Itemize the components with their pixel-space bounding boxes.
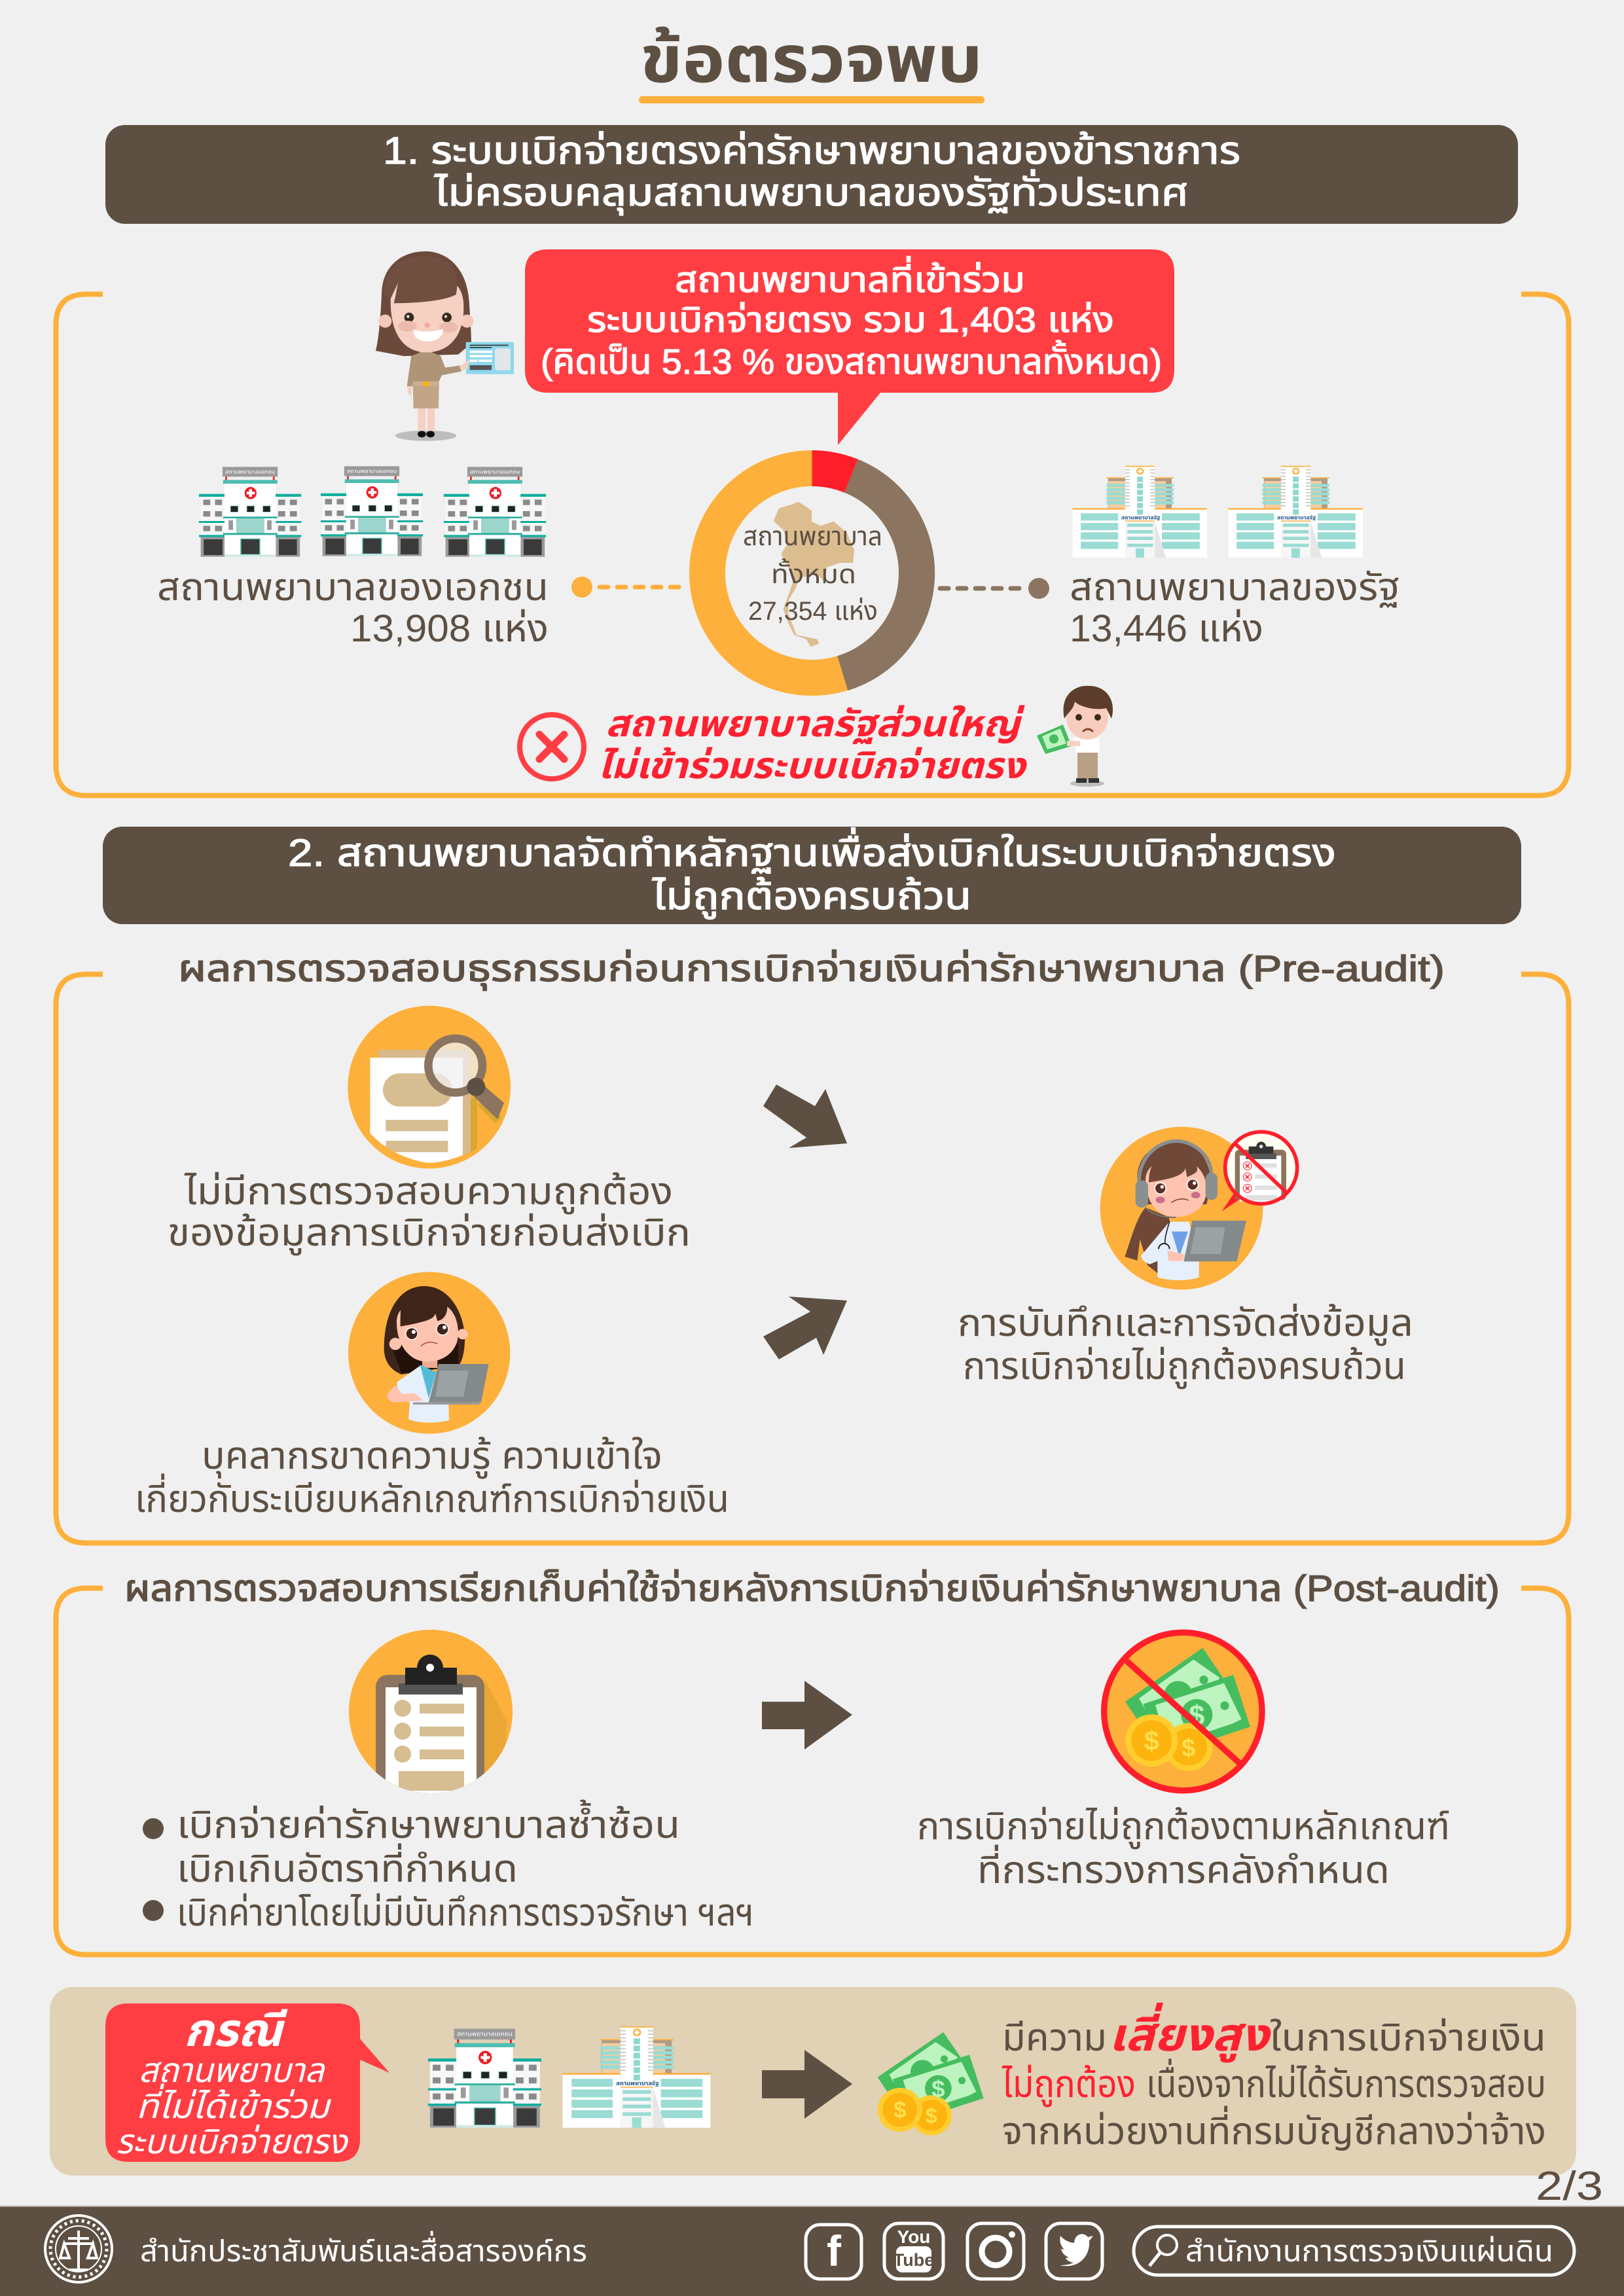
arrow: to risk <box>762 2050 852 2119</box>
icon: clipboard <box>349 1630 513 1806</box>
callout: non-participating hospitals: สถานพยาบาล <box>139 2052 325 2090</box>
text: private hospital count: สถานพยาบาลของเอกชน <box>157 566 549 609</box>
heading: section 1 <box>105 125 1518 224</box>
icon: man holding money <box>1037 686 1113 787</box>
list: post-audit findings: เบิกค่ายาโดยไม่มีบันทึกการตรวจรักษา ฯลฯ <box>177 1892 754 1934</box>
icon: document magnifier <box>348 1005 511 1169</box>
icon: money: $ <box>926 2104 937 2128</box>
text: incomplete records <box>958 1302 1413 1389</box>
callout: participating hospitals: (คิดเป็น 5.13 % ของสถานพยาบาลทั้งหมด) <box>541 340 1162 382</box>
donut chart: ทั้งหมด <box>771 558 856 589</box>
icon: instagram <box>967 2223 1024 2279</box>
callout: participating hospitals: สถานพยาบาลที่เข้าร่วม <box>675 256 1025 300</box>
icon: no money: $ <box>1189 1700 1204 1732</box>
icon: agency emblem <box>45 2215 112 2282</box>
text: office name: สำนักประชาสัมพันธ์และสื่อสารองค์กร <box>140 2231 587 2268</box>
arrow: down-right <box>763 1085 847 1148</box>
text: high risk: ไม่ถูกต้อง <box>1001 2063 1136 2107</box>
icon: private hospital: สถานพยาบาลเอกชน <box>457 2031 513 2037</box>
icon: twitter <box>1046 2223 1102 2279</box>
heading: section 2: 2. สถานพยาบาลจัดทำหลักฐานเพื่อส่งเบิกในระบบเบิกจ่ายตรง <box>288 827 1336 874</box>
icon: private hospitals <box>199 466 546 557</box>
text: lack of knowledge <box>135 1435 729 1520</box>
text: private hospital count <box>157 566 549 650</box>
panel: post-audit frame <box>56 1588 1568 1954</box>
icon: youtube: You <box>897 2227 930 2247</box>
panel: pre-audit frame <box>56 974 1568 1543</box>
text: high risk: เนื่องจากไม่ได้รับการตรวจสอบ <box>1146 2058 1546 2106</box>
callout: non-participating hospitals <box>105 2003 389 2162</box>
panel: risk summary <box>50 1987 1576 2176</box>
icon: map of Thailand <box>774 502 854 647</box>
heading: post-audit: ผลการตรวจสอบการเรียกเก็บค่าใช้จ่ายหลังการเบิกจ่ายเงินค่ารักษาพยาบาล (Post-audit) <box>124 1568 1500 1609</box>
icon: state hospitals <box>1073 466 1363 558</box>
text: improper disbursement <box>917 1805 1450 1892</box>
callout: participating hospitals <box>525 249 1174 445</box>
text: private hospital count: 13,908 แห่ง <box>350 607 549 650</box>
donut chart <box>689 450 935 696</box>
icon: staff with laptop <box>348 1272 510 1434</box>
icon: private hospitals: สถานพยาบาลเอกชน <box>470 469 520 475</box>
icon: state hospital <box>562 2026 710 2128</box>
icon: youtube: Tube <box>893 2250 934 2270</box>
heading: section 2: ไม่ถูกต้องครบถ้วน <box>652 875 971 919</box>
text: state hospital count: 13,446 แห่ง <box>1070 607 1263 650</box>
heading: section 2 <box>103 827 1521 924</box>
heading: pre-audit: ผลการตรวจสอบธุรกรรมก่อนการเบิกจ่ายเงินค่ารักษาพยาบาล (Pre-audit) <box>178 948 1445 990</box>
text: no accuracy check: ของข้อมูลการเบิกจ่ายก่อนส่งเบิก <box>168 1211 691 1255</box>
donut chart: 27,354 แห่ง <box>748 597 878 626</box>
text: lack of knowledge: เกี่ยวกับระเบียบหลักเกณฑ์การเบิกจ่ายเงิน <box>135 1473 729 1520</box>
icon: officer woman with card <box>376 251 514 441</box>
text: high risk: เสี่ยงสูง <box>1109 2003 1271 2063</box>
list: post-audit findings: เบิกเกินอัตราที่กำหนด <box>177 1843 518 1890</box>
icon: state hospitals: สถานพยาบาลรัฐ <box>1277 514 1316 520</box>
text: incomplete records: การเบิกจ่ายไม่ถูกต้องครบถ้วน <box>963 1345 1406 1389</box>
icon: youtube <box>884 2223 943 2279</box>
panel: section 1 frame <box>56 295 1568 796</box>
icon: private hospitals: สถานพยาบาลเอกชน <box>347 468 397 474</box>
search pill: สำนักงานการตรวจเงินแผ่นดิน <box>1185 2234 1553 2268</box>
text: state hospital count: สถานพยาบาลของรัฐ <box>1070 566 1400 609</box>
callout: non-participating hospitals: กรณี <box>184 2005 288 2056</box>
text: most state hospitals not participating <box>598 703 1027 786</box>
icon: red cross mark <box>520 715 584 779</box>
connector: private <box>571 577 685 598</box>
text: improper disbursement: การเบิกจ่ายไม่ถูกต้องตามหลักเกณฑ์ <box>917 1805 1450 1849</box>
icon: money <box>878 2032 984 2136</box>
icon: private hospital <box>428 2029 541 2128</box>
arrow: post-audit <box>762 1681 852 1749</box>
icon: facebook: f <box>827 2227 842 2275</box>
icon: no money <box>1104 1632 1262 1791</box>
arrow: up-right <box>763 1297 847 1359</box>
icon: state hospital: สถานพยาบาลรัฐ <box>616 2080 659 2087</box>
heading: section 1: 1. ระบบเบิกจ่ายตรงค่ารักษาพยาบาลของข้าราชการ <box>383 130 1240 172</box>
icon: private hospitals: สถานพยาบาลเอกชน <box>225 469 275 475</box>
icon: doctor with headset <box>1100 1127 1297 1289</box>
donut chart: สถานพยาบาล <box>743 522 882 551</box>
icon: facebook <box>806 2225 861 2279</box>
callout: participating hospitals: ระบบเบิกจ่ายตรง รวม 1,403 แห่ง <box>587 300 1114 340</box>
text: improper disbursement: ที่กระทรวงการคลังกำหนด <box>977 1844 1390 1892</box>
list: post-audit findings <box>143 1799 754 1934</box>
text: high risk: จากหน่วยงานที่กรมบัญชีกลางว่าจ้าง <box>1002 2106 1546 2153</box>
search pill <box>1134 2227 1574 2275</box>
icon: no money: $ <box>1182 1734 1195 1762</box>
icon: state hospitals: สถานพยาบาลรัฐ <box>1121 514 1160 520</box>
callout: non-participating hospitals: ระบบเบิกจ่ายตรง <box>116 2123 348 2161</box>
text: state hospital count <box>1070 566 1400 650</box>
icon: money: $ <box>931 2075 945 2102</box>
icon: money: $ <box>893 2098 907 2123</box>
text: high risk: ในการเบิกจ่ายเงิน <box>1270 2017 1546 2059</box>
icon: no money: $ <box>1144 1725 1159 1756</box>
text: high risk: มีความ <box>1002 2017 1107 2059</box>
page number: 2/3 <box>1536 2164 1603 2209</box>
callout: non-participating hospitals: ที่ไม่ได้เข้าร่วม <box>136 2083 331 2126</box>
text: no accuracy check <box>168 1170 691 1255</box>
connector: state <box>940 578 1049 599</box>
text: most state hospitals not participating: สถานพยาบาลรัฐส่วนใหญ่ <box>605 703 1026 744</box>
text: high risk <box>1001 2003 1546 2153</box>
text: incomplete records: การบันทึกและการจัดส่งข้อมูล <box>958 1302 1413 1346</box>
text: most state hospitals not participating: ไม่เข้าร่วมระบบเบิกจ่ายตรง <box>598 745 1027 786</box>
list: post-audit findings: เบิกจ่ายค่ารักษาพยาบาลซ้ำซ้อน <box>177 1799 680 1846</box>
title: ข้อตรวจพบ <box>640 23 983 96</box>
text: lack of knowledge: บุคลากรขาดความรู้ ความเข้าใจ <box>202 1435 662 1479</box>
footer <box>0 2206 1624 2296</box>
heading: section 1: ไม่ครอบคลุมสถานพยาบาลของรัฐทั่วประเทศ <box>434 169 1189 215</box>
text: no accuracy check: ไม่มีการตรวจสอบความถูกต้อง <box>184 1170 673 1214</box>
